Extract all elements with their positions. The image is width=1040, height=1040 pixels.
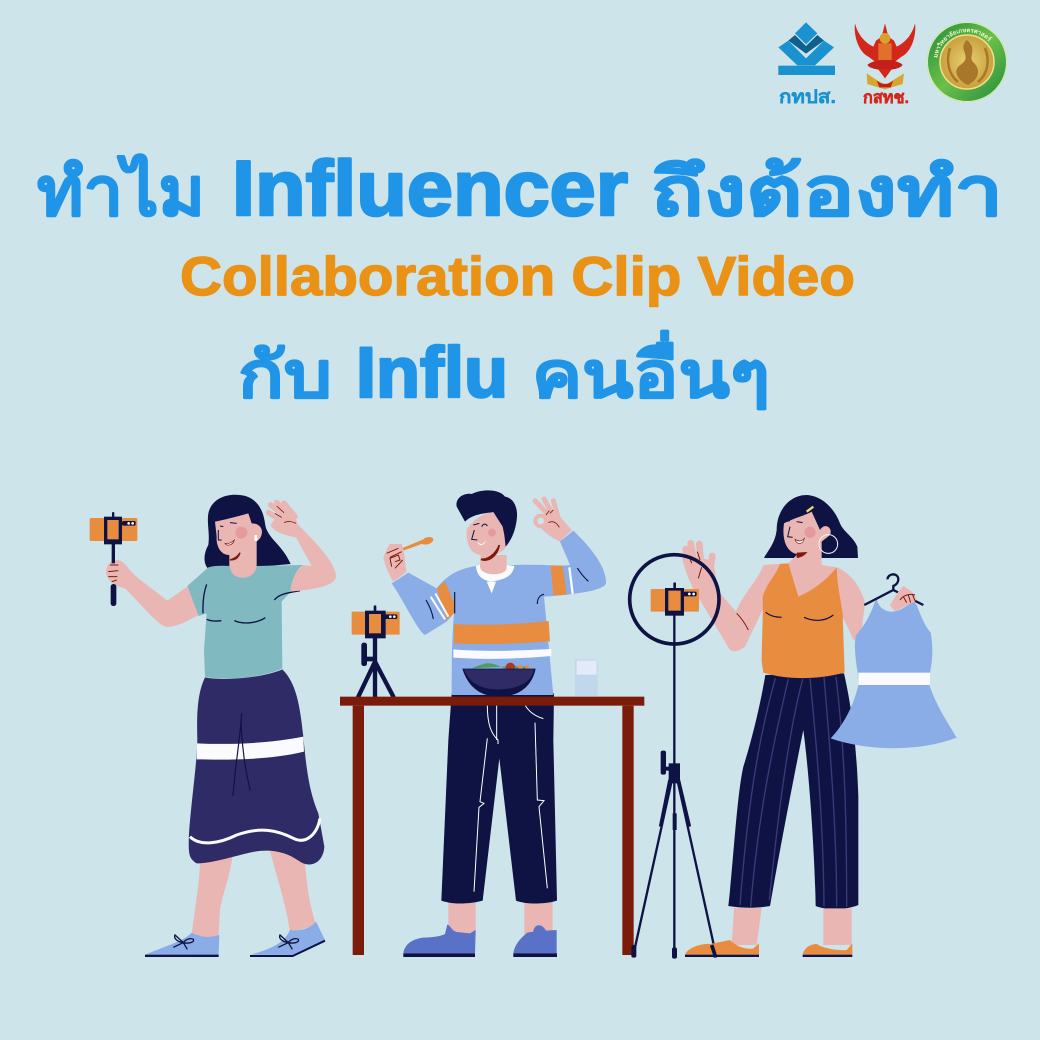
man at table with food xyxy=(340,490,644,957)
logo: กสทช. garuda: กสทช. xyxy=(863,88,909,107)
shoes xyxy=(685,940,759,955)
legs xyxy=(192,855,233,938)
ok hand xyxy=(535,499,572,542)
face xyxy=(783,512,831,555)
sweater xyxy=(392,531,606,695)
logo: university medallion: มหาวิทยาลัยเกษตรศาสตร์ xyxy=(934,28,993,58)
shoes xyxy=(146,933,219,955)
arm with stick xyxy=(106,560,198,627)
title line 3: Influ xyxy=(356,334,508,413)
ring light tripod xyxy=(631,613,718,959)
logo: กสทช. garuda xyxy=(855,23,915,107)
shoes xyxy=(403,924,476,953)
title line 3 xyxy=(238,330,770,413)
phone on ring xyxy=(651,582,699,616)
logo: university medallion xyxy=(927,22,1007,102)
pants xyxy=(728,673,858,909)
logo: กทปส.: กทปส. xyxy=(779,87,836,108)
logo: กทปส. xyxy=(778,22,836,108)
ring light xyxy=(630,555,719,644)
legs xyxy=(448,900,476,937)
hair xyxy=(764,495,858,558)
woman with ring light and dress xyxy=(630,495,957,959)
bowl xyxy=(472,663,530,669)
woman with selfie stick xyxy=(90,495,336,957)
title line 3: กับ xyxy=(238,339,332,411)
neck and chest xyxy=(763,537,865,640)
title line 1: Influencer xyxy=(232,144,628,232)
raised hand and arm xyxy=(682,543,763,651)
hand with spoon xyxy=(402,537,433,551)
title line 1: ถึงต้องทำ xyxy=(651,155,1003,230)
title line 1 xyxy=(37,144,1003,232)
title line 3: คนอื่นๆ xyxy=(532,330,770,411)
shirt xyxy=(187,565,303,679)
legs xyxy=(732,908,762,945)
raised arm xyxy=(269,503,336,592)
table xyxy=(340,697,644,706)
hanger and hand xyxy=(864,574,923,612)
pants xyxy=(441,693,557,904)
neck and face xyxy=(476,565,514,582)
dress xyxy=(831,597,957,748)
skirt xyxy=(189,669,324,865)
tripod phone xyxy=(352,605,400,697)
title line 2: Collaboration Clip Video xyxy=(180,245,855,307)
title line 1: ทำไม xyxy=(37,153,205,230)
top xyxy=(762,563,845,678)
hair xyxy=(456,490,517,547)
glass xyxy=(575,659,598,696)
